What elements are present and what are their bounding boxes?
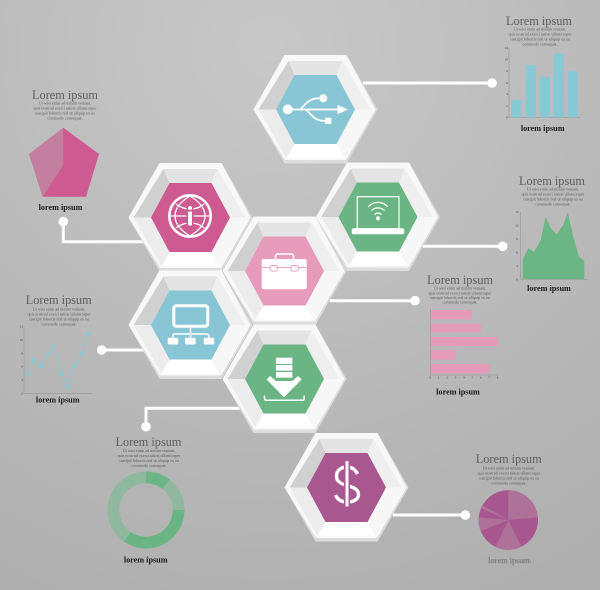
area chart: 6 — [516, 250, 518, 254]
icon: laptop with wifi — [352, 197, 404, 234]
text block: suscipit lobortis nisl ut aliquip ex ea — [479, 475, 539, 480]
heading: Lorem ipsum — [427, 273, 493, 287]
horizontal bar chart: 1 — [438, 376, 440, 380]
bar chart: 4 — [506, 92, 508, 96]
line chart: 2 — [21, 391, 23, 395]
hexagon: briefcase — [222, 216, 346, 325]
hexagon: usb — [254, 55, 378, 164]
hexagon: download — [222, 324, 346, 433]
text block: suscipit lobortis nisl ut aliquip ex ea — [35, 111, 95, 116]
text block — [117, 448, 181, 468]
panel: pentagon — [29, 88, 99, 212]
heading: Lorem ipsum — [506, 14, 572, 28]
text block: Ut wisi enim ad minim veniam, — [483, 465, 535, 471]
text block: commodo consequat. — [442, 300, 478, 305]
text block: suscipit lobortis nisl ut aliquip ex ea — [29, 316, 89, 321]
panel: line chart — [20, 293, 92, 405]
label: lorem ipsum — [39, 203, 83, 212]
icon: download — [264, 358, 304, 400]
label: lorem ipsum — [124, 556, 168, 564]
label: lorem ipsum — [436, 388, 480, 396]
icon: network monitor — [168, 306, 214, 344]
text block: commodo consequat. — [522, 42, 558, 46]
horizontal bar chart: 0 — [430, 376, 432, 380]
panel: donut chart — [113, 435, 182, 564]
text block: Ut wisi enim ad minim veniam, — [123, 448, 175, 454]
donut chart — [113, 477, 179, 543]
horizontal bar chart: 5 — [472, 376, 474, 380]
text block: Ut wisi enim ad minim veniam, — [527, 187, 579, 193]
text block — [428, 285, 492, 305]
hexagon: dollar — [284, 433, 408, 542]
label: lorem ipsum — [488, 556, 530, 565]
bar chart: 12 — [505, 46, 508, 50]
bar chart: 10 — [505, 58, 508, 62]
area chart: 12 — [516, 224, 519, 228]
text block: commodo consequat. — [535, 202, 571, 207]
bar chart: 6 — [506, 81, 508, 85]
line chart: 8 — [21, 351, 23, 355]
text block — [33, 101, 97, 121]
heading: Lorem ipsum — [26, 293, 92, 307]
area chart — [516, 210, 587, 281]
label: lorem ipsum — [521, 124, 565, 133]
text block: quis nostrud exerci tation ullamcorper — [477, 470, 541, 475]
text block: quis nostrud exerci tation ullamcorper — [33, 106, 97, 111]
text block — [27, 306, 91, 326]
text block: commodo consequat. — [41, 321, 77, 326]
line chart: 6 — [21, 365, 23, 369]
horizontal bar chart: 4 — [463, 376, 465, 380]
text block: quis nostrud exerci tation ullamcorper — [521, 192, 585, 197]
text block: suscipit lobortis nisl ut aliquip ex ea — [510, 36, 570, 42]
text block: commodo consequat. — [47, 116, 83, 121]
pentagon chart — [29, 128, 99, 197]
bar chart: 2 — [506, 104, 508, 108]
label: lorem ipsum — [36, 396, 80, 405]
icon: dollar — [336, 461, 358, 506]
text block: suscipit lobortis nisl ut aliquip ex ea — [119, 458, 179, 463]
heading: Lorem ipsum — [476, 452, 542, 466]
horizontal bar chart: 6 — [480, 376, 482, 380]
icon: usb — [283, 94, 348, 124]
text block: quis nostrud exerci tation ullamcorper — [508, 32, 572, 36]
text block: Ut wisi enim ad minim veniam, — [33, 306, 85, 312]
panel: pie chart — [476, 452, 542, 566]
heading: Lorem ipsum — [116, 435, 182, 449]
bar chart — [505, 46, 580, 119]
connector: dollar to pie — [393, 510, 470, 520]
hexagon: laptop — [316, 162, 440, 271]
text block: Ut wisi enim ad minim veniam, — [39, 101, 91, 107]
bar chart: 8 — [506, 69, 508, 73]
line chart: 10 — [20, 338, 24, 342]
bar chart: 0 — [506, 115, 508, 119]
line chart — [20, 324, 92, 395]
text block — [477, 465, 541, 485]
panel: bar chart — [505, 14, 580, 133]
area chart: 0 — [516, 277, 518, 281]
area chart: 15 — [516, 210, 519, 214]
text block: suscipit lobortis nisl ut aliquip ex ea — [523, 197, 583, 202]
text block: quis nostrud exerci tation ullamcorper — [428, 290, 492, 295]
horizontal bar chart: 7 — [488, 376, 490, 380]
connector: network to line chart — [97, 345, 146, 355]
icon: briefcase — [262, 254, 307, 289]
text block: commodo consequat. — [131, 463, 167, 468]
text block: commodo consequat. — [491, 480, 527, 485]
panel: horizontal bar chart — [427, 273, 499, 396]
text block: Ut wisi enim ad minim veniam, — [514, 27, 566, 33]
label: lorem ipsum — [527, 284, 571, 293]
area chart: 3 — [516, 264, 518, 268]
text block: quis nostrud exerci tation ullamcorper — [117, 453, 181, 458]
label: lorem ipsum — [488, 556, 532, 566]
horizontal bar chart: 8 — [497, 376, 499, 380]
line chart: 12 — [20, 324, 24, 328]
heading: Lorem ipsum — [519, 174, 585, 188]
text block: Ut wisi enim ad minim veniam, — [434, 285, 486, 291]
heading: Lorem ipsum — [32, 88, 98, 102]
text block: quis nostrud exerci tation ullamcorper — [27, 311, 91, 316]
text block — [508, 27, 572, 46]
horizontal bar chart — [430, 309, 499, 380]
line chart: 4 — [21, 378, 23, 382]
connector: usb to bar chart — [363, 78, 497, 88]
connector: briefcase to horizontal bars — [330, 296, 420, 306]
area chart: 9 — [516, 237, 518, 241]
pie chart — [479, 490, 538, 550]
connector: download to donut — [141, 408, 242, 432]
text block: suscipit lobortis nisl ut aliquip ex ea — [430, 295, 490, 300]
horizontal bar chart: 3 — [455, 376, 457, 380]
panel: area chart — [516, 174, 587, 293]
text block — [521, 187, 585, 207]
connector: globe to pentagon — [58, 217, 146, 242]
horizontal bar chart: 2 — [446, 376, 448, 380]
connector: laptop to area chart — [423, 242, 508, 251]
hexagon: globe — [128, 163, 252, 272]
hexagon: network — [128, 270, 252, 379]
icon: globe — [169, 195, 211, 237]
